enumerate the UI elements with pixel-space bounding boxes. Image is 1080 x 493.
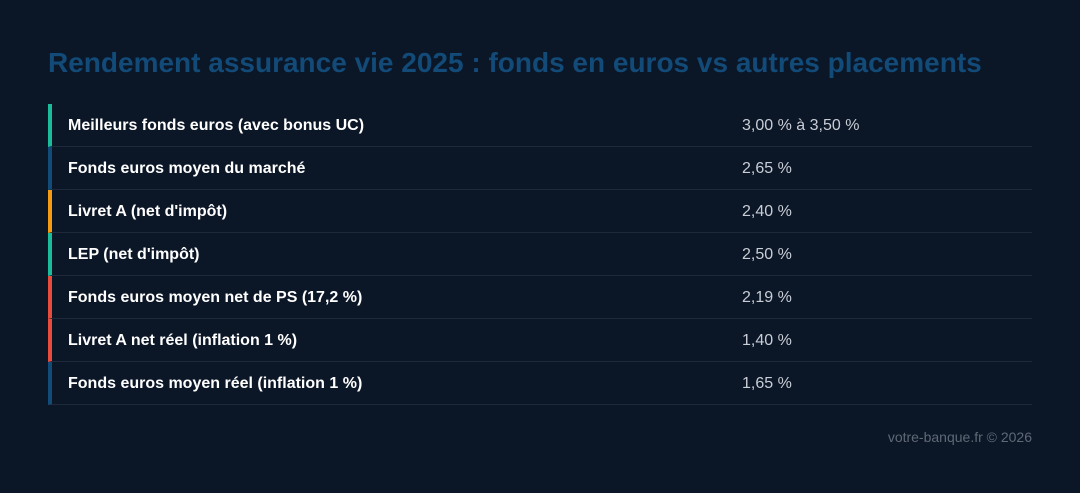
row: livret A: 2,40 %	[742, 203, 792, 220]
title: Rendement assurance vie 2025 : fonds en euros vs autres placements	[48, 47, 982, 78]
row: fonds euros moyen	[48, 147, 1032, 190]
row: LEP: 2,50 %	[742, 246, 792, 263]
footer credit: votre-banque.fr © 2026	[888, 429, 1032, 445]
table: rendements	[48, 104, 1032, 405]
row: fonds euros net PS	[48, 276, 1032, 319]
row: livret A	[48, 190, 1032, 233]
row: fonds euros réel: 1,65 %	[742, 375, 792, 392]
row: LEP	[48, 233, 1032, 276]
row: livret A net réel	[48, 319, 1032, 362]
row: meilleurs fonds euros: Meilleurs fonds euros (avec bonus UC)	[68, 117, 364, 134]
row: fonds euros moyen: Fonds euros moyen du marché	[68, 160, 305, 177]
row: fonds euros moyen: 2,65 %	[742, 160, 792, 177]
row: livret A: Livret A (net d'impôt)	[68, 203, 227, 220]
row: fonds euros réel: Fonds euros moyen réel (inflation 1 %)	[68, 375, 362, 392]
row: fonds euros réel	[48, 362, 1032, 405]
row: meilleurs fonds euros: 3,00 % à 3,50 %	[742, 117, 859, 134]
row: livret A net réel: Livret A net réel (inflation 1 %)	[68, 332, 297, 349]
row: livret A net réel: 1,40 %	[742, 332, 792, 349]
row: fonds euros net PS: 2,19 %	[742, 289, 792, 306]
row: fonds euros net PS: Fonds euros moyen net de PS (17,2 %)	[68, 289, 362, 306]
row: LEP: LEP (net d'impôt)	[68, 246, 200, 263]
row: meilleurs fonds euros	[48, 104, 1032, 147]
